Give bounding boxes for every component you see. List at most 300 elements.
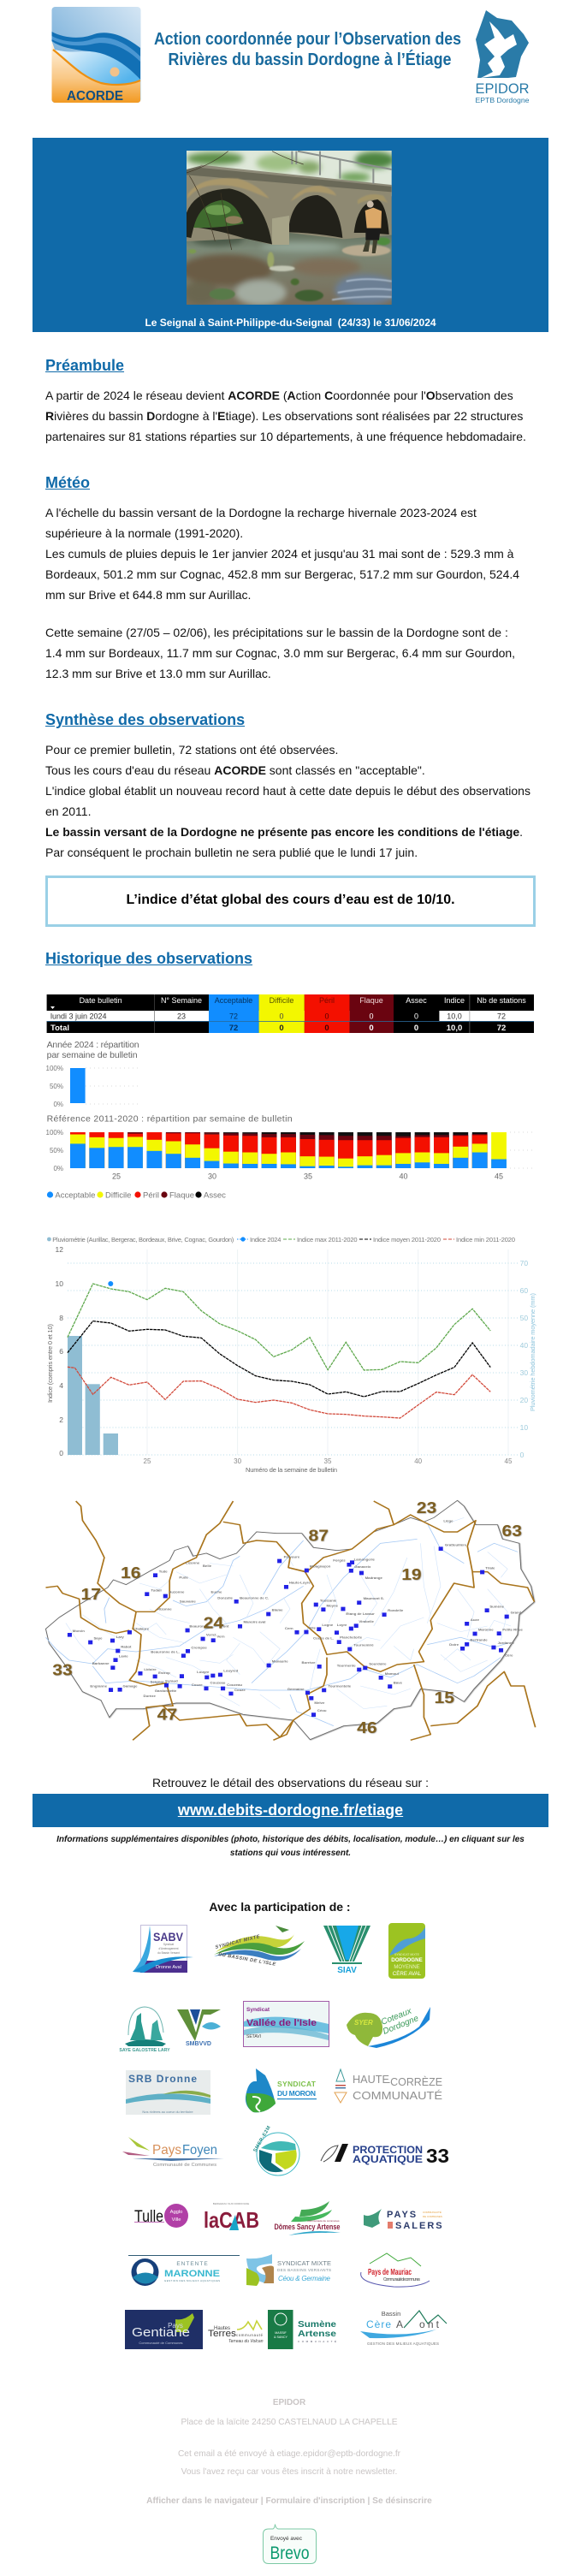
table: bulletin: Total [50, 1024, 69, 1033]
logo: Céou et Germaine: SYNDICAT MIXTE [277, 2259, 331, 2267]
chart: indice et pluviométrie: 60 [520, 1286, 528, 1295]
chart: année 2024 répartition: 50% [50, 1083, 63, 1090]
logo: SABV: du Bassin Versant [157, 1951, 180, 1955]
chart: référence 2011-2020 répartition [46, 1114, 532, 1200]
table: bulletin: 0 [414, 1024, 418, 1033]
station labels: Lidoire [144, 1667, 157, 1671]
panel: photo banner [33, 138, 548, 332]
logo: Haute-Corrèze Communauté: COMMUNAUTÉ [353, 2089, 442, 2102]
logo: SABV [133, 1926, 193, 1973]
table: bulletin: 0 [414, 1012, 418, 1020]
chart: indice et pluviométrie: 2 [59, 1416, 63, 1424]
table: bulletin: 23 [177, 1012, 186, 1020]
logo: Pays Gentiane: Pays [168, 2322, 183, 2330]
logo: Pays de Salers: SALERS [395, 2221, 444, 2231]
station labels: Tourmente [337, 1664, 356, 1667]
station labels: Planchetorte [340, 1635, 363, 1640]
logo: Hautes Terres: Hautes [214, 2326, 230, 2331]
logo: Coteaux de Dordogne [347, 2006, 430, 2048]
text: météo semaine: Cette semaine (27/05 – 02/06), les précipitations sur le bassin de la Dordogne sont de : [45, 626, 508, 639]
chart: indice et pluviométrie: 8 [59, 1314, 63, 1322]
logo: Bassin Cère Amont: Cère [366, 2318, 391, 2330]
text: météo semaine [45, 626, 515, 680]
chart: indice et pluviométrie: Pluviométrie hebdomadaire moyenne (mm) [529, 1292, 536, 1411]
table: bulletin: Nb de stations [477, 996, 526, 1005]
logo: Sumène Artense: & SANCY [274, 2336, 287, 2339]
logo: Pays Gentiane: Communauté de Communes [139, 2341, 183, 2345]
logo: bassin de l'Isle: SYNDICAT MIXTE [215, 1934, 261, 1950]
logo: Pays de Salers: DE COMMUNES [423, 2215, 442, 2218]
department boundaries [45, 1501, 536, 1740]
logo: Dordogne moyenne: DORDOGNE [391, 1957, 423, 1963]
chart: indice et pluviométrie: 20 [520, 1396, 528, 1404]
logo: Pays de Mauriac [361, 2253, 430, 2287]
station labels: Elle [309, 1626, 317, 1629]
department numbers: 15 [435, 1689, 454, 1707]
table: bulletin: 0 [279, 1012, 284, 1020]
station labels: Pervoure [284, 1555, 300, 1559]
station labels: Saye [93, 1636, 103, 1641]
chart: année 2024 répartition: 0% [53, 1101, 63, 1108]
table: bulletin: Date bulletin [80, 996, 122, 1005]
logo: EPIDOR [476, 10, 530, 104]
station labels: Engranne [90, 1684, 108, 1688]
logo: Bassin Cère Amont: A [396, 2318, 403, 2330]
logo: EPIDOR: EPIDOR [476, 81, 530, 97]
logo: SMBVVD: SMBVVD [186, 2041, 211, 2047]
station labels: Rabot [121, 1645, 132, 1649]
rivers [45, 1523, 518, 1726]
station labels: Eyraud [165, 1679, 178, 1683]
bridge [187, 175, 392, 245]
station labels: Vern2 [206, 1633, 216, 1636]
table: bulletin: 0 [369, 1024, 374, 1033]
table: bulletin: 72 [229, 1012, 238, 1020]
logo: Haute-Corrèze Communauté: HAUTE [353, 2073, 389, 2086]
station labels: Tourmentelle [329, 1684, 352, 1689]
footer: adresse: Place de la laïcite 24250 CASTELNAUD LA CHAPELLE [181, 2418, 398, 2427]
logo: SABV: d'Aménagement [158, 1947, 179, 1950]
logo: Saye Galostre Lary: SAYE GALOSTRE LARY [119, 2048, 170, 2053]
chart: indice et pluviométrie: 45 [505, 1457, 513, 1465]
index lines [68, 1284, 490, 1418]
logo: Dômes Sancy Artense: Dômes Sancy Artense [274, 2223, 341, 2231]
station labels: Forgès [333, 1558, 346, 1563]
text: préambule [45, 389, 526, 443]
chart: indice et pluviométrie: 10 [56, 1279, 63, 1288]
logo: bassin de l'Isle [214, 1926, 305, 1968]
photo: bridge on the Seignal [187, 151, 392, 305]
station labels: Cern [285, 1626, 293, 1630]
logo: Pays de Mauriac: Pays de Mauriac [368, 2268, 412, 2277]
text: retrouvez: Retrouvez le détail des observations du réseau sur : [152, 1776, 429, 1790]
station labels: Blame [272, 1608, 283, 1612]
station labels: Doire [449, 1642, 459, 1647]
chart: indice et pluviométrie: Indice (compris entre 0 et 10) [46, 1323, 54, 1403]
table: bulletin: Acceptable [215, 996, 252, 1005]
logo: Brevo [263, 2525, 317, 2564]
chart: année 2024 répartition: Année 2024 : répartition [47, 1040, 139, 1050]
logo: SMBVVD [177, 2009, 221, 2047]
station labels: Sumène [489, 1605, 505, 1609]
table: bulletin: 72 [497, 1024, 506, 1033]
department numbers: 63 [502, 1522, 522, 1540]
logo: Bassin Cère Amont: Bassin [382, 2310, 400, 2318]
station labels: Céou [317, 1708, 327, 1712]
station labels: Couzeau [227, 1683, 243, 1687]
department numbers: 47 [157, 1706, 177, 1724]
station labels: Sourdoire [369, 1662, 387, 1665]
logo: Vallée de l'Isle: Syndicat [246, 2007, 270, 2013]
station labels: Belle [203, 1564, 212, 1568]
logo: SRB Dronne [126, 2070, 210, 2115]
chart: référence 2011-2020 répartition: 30 [208, 1172, 216, 1181]
logo: Entente Maronne: ENTENTE [176, 2261, 209, 2267]
station labels: Lary [116, 1635, 125, 1639]
logo: Dordogne moyenne: SYNDICAT MIXTE [394, 1953, 420, 1956]
chart: indice et pluviométrie: 0 [520, 1451, 525, 1459]
logo: Entente Maronne [128, 2255, 240, 2286]
map: bassin Dordogne [44, 1499, 536, 1741]
logo: Coteaux de Dordogne: Dordogne [382, 2014, 420, 2037]
station labels: Rizonne [157, 1607, 172, 1611]
chart: référence 2011-2020 répartition: Référence 2011-2020 : répartition par semaine de bulletin [47, 1114, 293, 1125]
text: météo cumuls: Bordeaux, 501.2 mm sur Cognac, 452.8 mm sur Bergerac, 517.2 mm sur Gourdon, 524.4 [45, 567, 519, 581]
station labels: Estrop [158, 1671, 170, 1675]
link band: www.debits-dordogne.fr/etiage [178, 1801, 403, 1819]
chart: indice et pluviométrie: 40 [520, 1341, 528, 1350]
logo: Tulle Agglo [134, 2204, 188, 2228]
station labels: Lamongerie [354, 1558, 376, 1561]
logo: bassin de l'Isle: DU BASSIN DE L'ISLE [218, 1952, 276, 1968]
logo: Céou et Germaine: DES BASSINS VERSANTS [277, 2268, 331, 2272]
logo: Dômes Sancy Artense: communauté de communes [307, 2219, 340, 2223]
station labels: Couzeau [210, 1681, 226, 1684]
chart: référence 2011-2020 répartition: 100% [46, 1129, 63, 1137]
station labels: Maronne [478, 1628, 495, 1631]
chart: indice et pluviométrie: Numéro de la semaine de bulletin [246, 1466, 337, 1474]
chart: année 2024 répartition [46, 1040, 139, 1108]
logo: Protection Aquatique 33: PROTECTION [353, 2144, 423, 2156]
logo: Tulle Agglo: Ville [172, 2217, 181, 2223]
link band [33, 1794, 548, 1827]
heading: Préambule: Préambule [45, 357, 124, 374]
chart: indice et pluviométrie: 35 [324, 1457, 332, 1465]
department numbers [52, 1499, 522, 1737]
station labels: Haute-Loyre [289, 1581, 311, 1585]
chart: référence 2011-2020 répartition: 40 [399, 1172, 408, 1181]
logo: Hautes Terres: Terres [208, 2329, 237, 2339]
station labels: Louyre [197, 1670, 210, 1674]
station labels: Moyne [326, 1604, 339, 1607]
logo: Pays Gentiane: Gentiane [132, 2325, 190, 2340]
chart: indice et pluviométrie: 6 [59, 1347, 63, 1356]
table: bulletin: 0 [324, 1024, 329, 1033]
station labels: Maumont S. [364, 1596, 384, 1600]
chart: année 2024 répartition: 100% [46, 1065, 63, 1072]
logo: Hautes Terres: communauté [236, 2333, 264, 2337]
text: synthèse: Tous les cours d'eau du réseau ACORDE sont classés en "acceptable". [45, 763, 425, 777]
station labels: Tournemiré [353, 1643, 374, 1647]
station labels: Tudail [151, 1588, 162, 1592]
logo: Pays Gentiane [125, 2310, 203, 2349]
logo: SABV: Syndicat [163, 1943, 174, 1946]
legend [47, 1191, 226, 1200]
basin outline [45, 1500, 534, 1740]
station labels: Grand [511, 1611, 522, 1614]
station labels: Manoire aval [244, 1620, 266, 1624]
text: météo cumuls: Les cumuls de pluies depuis le 1er janvier 2024 et jusqu'au 31 mai sont de : 529.3 mm à [45, 547, 513, 561]
station labels: Beauronne de C. [240, 1596, 269, 1600]
station labels: Rondelle [388, 1608, 404, 1612]
heading: participation: Avec la participation de : [209, 1900, 351, 1914]
text: préambule: Rivières du bassin Dordogne à l'Etiage). Les observations sont réalisées par 22 structures [45, 409, 523, 423]
logo: Dordogne moyenne: CÈRE AVAL [393, 1971, 422, 1977]
logo: SRB Dronne: Nos rivières au coeur du territoire [142, 2110, 193, 2114]
station labels: Pont [221, 1624, 229, 1628]
station labels: Loyre [337, 1623, 347, 1627]
logo: Pays de Salers: PAYS [387, 2210, 418, 2220]
station labels: Toulzanie [320, 1599, 337, 1602]
logo: ACORDE: ACORDE [67, 89, 123, 104]
text: météo cumuls: A l'échelle du bassin versant de la Dordogne la recharge hivernale 2023-2024 est [45, 506, 477, 519]
table: bulletin: 10,0 [447, 1024, 462, 1033]
logo: Pays de Salers: COMMUNAUTÉ [423, 2210, 442, 2214]
logo: SMER-E2M [253, 2125, 299, 2175]
logo: Coteaux de Dordogne: SYER [354, 2019, 373, 2027]
station labels: Seignal [151, 1680, 163, 1684]
station labels: Barbanne [92, 1661, 110, 1665]
station labels: Cère [505, 1653, 513, 1657]
station labels: Couze [234, 1688, 246, 1692]
logo: Tulle Agglo: Tulle [134, 2208, 163, 2226]
station labels: Gratteuilière [445, 1543, 467, 1546]
logo: Protection Aquatique 33: 33 [426, 2145, 449, 2167]
chart: indice et pluviométrie: 25 [144, 1457, 151, 1465]
logo: Tulle Agglo: Agglo [170, 2210, 182, 2215]
station labels: Vimbelle [359, 1619, 375, 1623]
footer: mention email: Vous l'avez reçu car vous êtes inscrit à notre newsletter. [181, 2467, 397, 2477]
logo: SMER-E2M: SMER-E2M [253, 2125, 272, 2153]
text: préambule: partenaires sur 81 stations réparties sur 10 départements, à une fréquence hebdomadaire. [45, 430, 526, 443]
footer: liens: Afficher dans le navigateur | Formulaire d'inscription | Se désinscrire [146, 2496, 432, 2506]
logo: Bassin Cère Amont: GESTION DES MILIEUX AQUATIQUES [367, 2342, 439, 2346]
title [154, 30, 461, 69]
logo: la CAB: BERGERAC SUD DORDOGNE [213, 2202, 249, 2205]
photo caption: Le Seignal à Saint-Philippe-du-Seignal (24/33) le 31/06/2024 [145, 317, 436, 329]
chart: indice et pluviométrie: 40 [414, 1457, 423, 1465]
logo: Protection Aquatique 33: AQUATIQUE [353, 2153, 423, 2165]
chart: référence 2011-2020 répartition: 25 [112, 1172, 121, 1181]
station labels: Beauronne [189, 1624, 210, 1629]
station labels: Couze [192, 1683, 204, 1687]
text: météo semaine: 12.3 mm sur Brive et 13.0 mm sur Aurillac. [45, 667, 271, 680]
legend: Indice max 2011-2020 [297, 1236, 358, 1243]
station labels: Morcin [73, 1629, 85, 1633]
logo: SABV: Dronne Aval [156, 1965, 181, 1970]
callout: indice global [45, 875, 536, 927]
legend: Pluviométrie (Aurillac, Bergerac, Bordeaux, Brive, Cognac, Gourdon) [52, 1236, 234, 1243]
station labels: Euche [210, 1590, 222, 1594]
station labels: Pude [179, 1576, 189, 1579]
chart: indice et pluviométrie: 50 [520, 1314, 528, 1322]
heading: Météo: Météo [45, 474, 90, 491]
logo: Sumène Artense [268, 2310, 337, 2349]
logo: EPIDOR: EPTB Dordogne [476, 96, 530, 104]
legend [47, 1236, 515, 1243]
department numbers: 46 [357, 1719, 377, 1737]
station labels: Madrange [365, 1576, 383, 1580]
chart: indice et pluviométrie: 12 [56, 1245, 63, 1254]
chart: référence 2011-2020 répartition: 45 [495, 1172, 503, 1181]
station labels: Ganaveix [354, 1564, 371, 1569]
station labels: Tude [159, 1570, 169, 1573]
logo: Protection Aquatique 33 [321, 2144, 449, 2167]
logo: Pays Foyen: Pays [152, 2143, 181, 2158]
table: bulletin: 10,0 [447, 1012, 462, 1020]
station labels: Beauronne de L. [151, 1650, 180, 1654]
station labels: Petite Rhue [502, 1628, 524, 1631]
logos: partenaires [119, 1923, 449, 2349]
text: météo cumuls: supérieure à la normale (1991-2020). [45, 526, 243, 540]
station labels: Mamoul [385, 1671, 399, 1676]
station labels: Bave [394, 1681, 403, 1684]
logo: Coteaux de Dordogne: Coteaux [380, 2006, 414, 2027]
logo: la CAB: laCAB [204, 2207, 259, 2233]
station labels: Crempse [191, 1646, 208, 1649]
rainfall bars [68, 1336, 118, 1455]
station labels: Durèze [144, 1694, 157, 1698]
station labels: Borrèze [301, 1660, 316, 1665]
station labels: Etang de Lavaur [346, 1611, 375, 1616]
table: bulletin: Assec [406, 996, 427, 1005]
heading: Historique: Historique des observations [45, 950, 252, 967]
logo: Pays de Salers [364, 2209, 444, 2231]
station labels: Melve [314, 1701, 325, 1705]
legend: Indice min 2011-2020 [456, 1236, 515, 1243]
table: bulletin: 0 [369, 1012, 374, 1020]
legend: Indice moyen 2011-2020 [373, 1236, 441, 1243]
logo: Céou et Germaine [246, 2254, 331, 2286]
footer: mention email: Cet email a été envoyé à etiage.epidor@eptb-dordogne.fr [178, 2449, 400, 2459]
chart: indice et pluviométrie: 30 [234, 1457, 242, 1465]
station labels: Lavie [119, 1654, 129, 1658]
table: bulletin: Péril [319, 996, 335, 1005]
logo: Haute-Corrèze Communauté: -CORRÈZE [387, 2075, 442, 2088]
chart: indice et pluviométrie: 10 [520, 1423, 528, 1432]
chart: année 2024 répartition: par semaine de bulletin [47, 1050, 138, 1060]
table: bulletin: Flaque [359, 996, 383, 1005]
person [367, 201, 374, 208]
logo: Syndicat du Moron [246, 2069, 317, 2112]
chart: indice et pluviométrie [46, 1236, 536, 1474]
logo: SRB Dronne: SRB Dronne [128, 2073, 197, 2085]
logo: Saye Galostre Lary [119, 2007, 170, 2053]
text: synthèse: Pour ce premier bulletin, 72 stations ont été observées. [45, 743, 338, 757]
table: bulletin: 0 [324, 1012, 329, 1020]
logo: Pays Foyen: Communauté de Communes [153, 2163, 216, 2168]
department numbers: 16 [121, 1564, 141, 1582]
logo: Bassin Cère Amont [360, 2310, 447, 2346]
table: bulletin: 72 [497, 1012, 506, 1020]
chart: indice et pluviométrie: 30 [520, 1368, 528, 1377]
text: synthèse: L'indice global établit un nouveau record haut à cette date depuis le début des observations [45, 784, 530, 798]
heading: Synthèse: Synthèse des observations [45, 711, 245, 728]
text: météo semaine: 1.4 mm sur Bordeaux, 11.7 mm sur Cognac, 3.0 mm sur Bergerac, 6.4 mm sur Gourdon, [45, 646, 515, 660]
station labels: Auzonne [169, 1590, 185, 1594]
logo: Entente Maronne: MARONNE [164, 2269, 220, 2279]
footer: mention email [178, 2449, 400, 2477]
logo: Vallée de l'Isle: Vallée de l'Isle [246, 2018, 317, 2028]
text: synthèse: Le bassin versant de la Dordogne ne présente pas encore les conditions de l'étiage. [45, 825, 523, 839]
logo: Pays de Mauriac: Communauté de communes [383, 2277, 421, 2282]
chart: référence 2011-2020 répartition: 0% [53, 1165, 63, 1172]
table: bulletin [46, 994, 534, 1033]
station labels: Couze de L. [313, 1636, 334, 1640]
logo: SIAV [323, 1926, 370, 1975]
station labels: Donzelle [217, 1596, 234, 1600]
footer: EPIDOR: EPIDOR [273, 2398, 305, 2407]
station labels: Auze [471, 1617, 480, 1622]
department numbers: 19 [401, 1566, 422, 1584]
station labels: Bertrande [470, 1638, 489, 1642]
logo: Syndicat du Moron: DU MORON [277, 2089, 316, 2098]
station labels: Gardonnette [155, 1689, 177, 1693]
table: bulletin: lundi 3 juin 2024 [50, 1012, 107, 1020]
station labels: Ribagnaçon [310, 1564, 331, 1569]
logo: Sumène Artense: COMMUNAUTÉ [298, 2339, 336, 2343]
text: informations supplémentaires [56, 1835, 525, 1858]
chart: indice et pluviométrie: 70 [520, 1259, 528, 1267]
text: informations supplémentaires: Informations supplémentaires disponibles (photo, historique des débits, localisation, module…) en cliquant sur les [56, 1835, 525, 1844]
station labels: Sauvanie [180, 1600, 197, 1603]
logo: SABV: SABV [153, 1930, 184, 1944]
logo: Sumène Artense: Artense [298, 2330, 337, 2339]
chart: indice et pluviométrie: 0 [59, 1449, 63, 1457]
station labels: Logne [322, 1623, 334, 1627]
logo: Céou et Germaine: Céou & Germaine [278, 2275, 331, 2282]
table: bulletin: Difficile [270, 996, 293, 1005]
station labels: Gamage [123, 1684, 138, 1689]
logo: ACORDE [51, 7, 140, 103]
table: bulletin: N° Semaine [161, 996, 202, 1005]
logo: Brevo: Brevo [270, 2543, 310, 2563]
logo: Dordogne moyenne [388, 1923, 425, 1979]
department numbers: 87 [308, 1528, 329, 1545]
logo: Bassin Cère Amont: ont [419, 2318, 440, 2330]
text: météo cumuls [45, 506, 519, 602]
station labels [73, 1519, 524, 1712]
station labels: Chalaure [133, 1627, 150, 1630]
logo: Dômes Sancy Artense [274, 2201, 341, 2235]
text: informations supplémentaires: stations qui vous intéressent. [230, 1849, 351, 1858]
logo: Entente Maronne: GESTION DES MILIEUX AQUATIQUES [164, 2279, 220, 2282]
table: bulletin: Indice [444, 996, 465, 1005]
station labels: Lizonne [186, 1561, 200, 1564]
station labels: Germaine [287, 1687, 305, 1691]
station labels: Louyred [223, 1669, 239, 1673]
chart: référence 2011-2020 répartition: 50% [50, 1147, 63, 1154]
table: bulletin: 72 [229, 1024, 238, 1033]
logo: Pays Foyen [122, 2137, 224, 2168]
text: préambule: A partir de 2024 le réseau devient ACORDE (Action Coordonnée pour l'Observation des [45, 389, 513, 402]
chart: indice et pluviométrie: 4 [59, 1381, 63, 1390]
department numbers: 23 [417, 1499, 436, 1517]
logo: Haute-Corrèze Communauté [335, 2069, 442, 2103]
callout: indice global: L’indice d’état global des cours d’eau est de 10/10. [126, 893, 455, 907]
logo: Dordogne moyenne: MOYENNE [394, 1965, 420, 1970]
station labels: Vern [216, 1635, 225, 1638]
